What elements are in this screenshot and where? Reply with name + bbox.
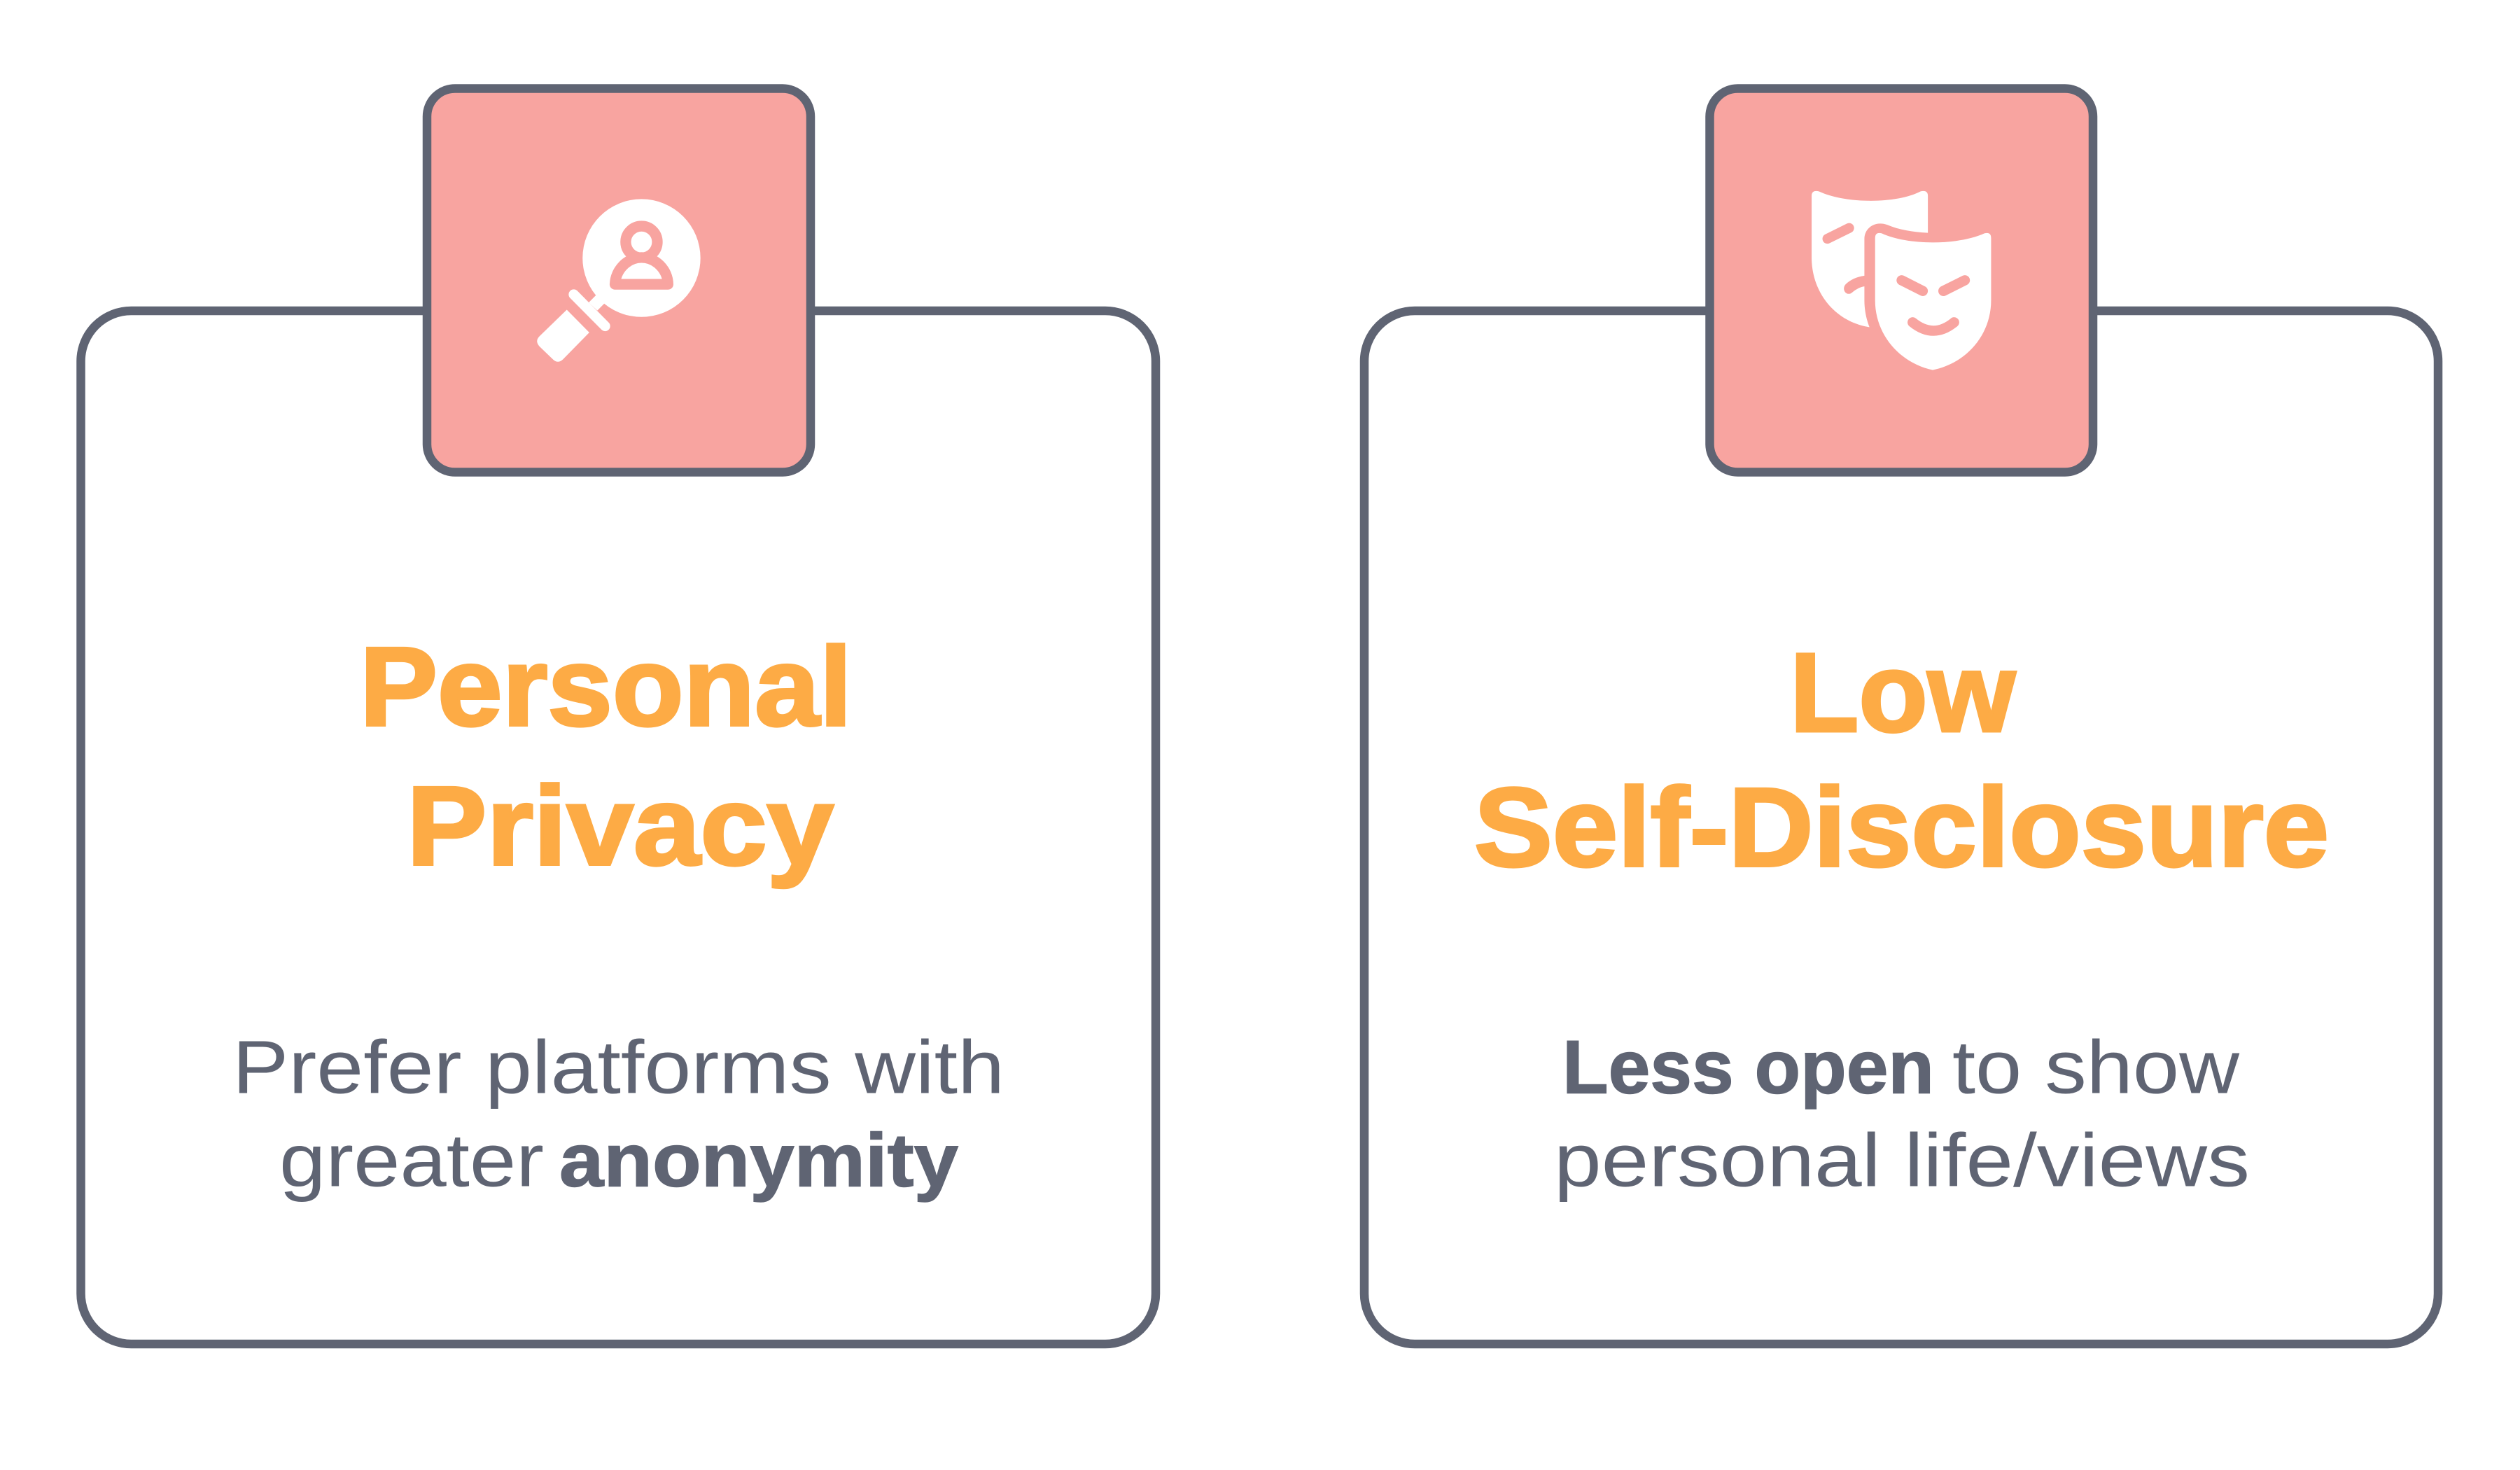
text block: openness: Less open: [1562, 1025, 1934, 1109]
text block: openness: [1554, 1025, 2250, 1203]
text block: platform preference: [232, 1025, 1004, 1203]
icon: theatre masks: [1812, 191, 1991, 370]
text block: platform preference: Prefer platforms with: [232, 1025, 1004, 1109]
heading: Low Self-Disclosure: Self-Disclosure: [1474, 764, 2329, 890]
panel: low self-disclosure: [1364, 88, 2438, 1344]
icon tile: low self-disclosure: [1709, 88, 2093, 472]
heading: Personal Privacy: [360, 624, 852, 888]
heading: Personal Privacy: Privacy: [407, 763, 834, 888]
card outline: low self-disclosure: [1364, 311, 2438, 1344]
text block: openness: personal life/views: [1554, 1117, 2250, 1203]
heading: Low Self-Disclosure: Low: [1790, 630, 2016, 755]
card outline: personal privacy: [81, 311, 1156, 1344]
text block: openness: to show: [1952, 1025, 2240, 1109]
heading: Low Self-Disclosure: [1474, 630, 2329, 890]
text block: platform preference: anonymity: [559, 1117, 958, 1203]
icon tile: personal privacy: [427, 88, 811, 472]
heading: Personal Privacy: Personal: [360, 624, 852, 749]
text block: platform preference: greater: [279, 1117, 544, 1203]
panel: personal privacy: [81, 88, 1156, 1344]
icon: magnifying glass over person: [537, 199, 701, 362]
